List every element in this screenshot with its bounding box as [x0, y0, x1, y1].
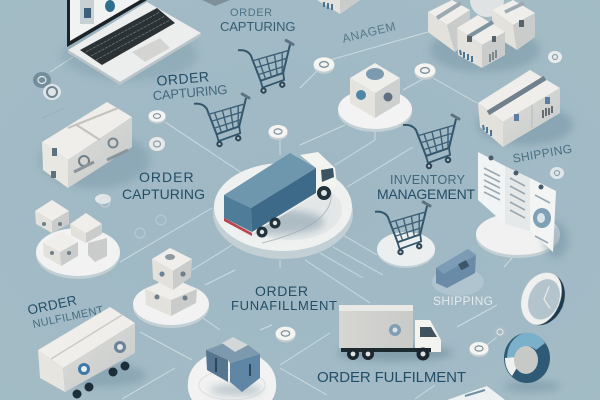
truck cab [415, 320, 441, 352]
cube back right [70, 213, 102, 233]
label: inventory management [377, 173, 475, 202]
box b [457, 15, 505, 45]
icon: blue shipping block [432, 249, 484, 296]
keyboard [80, 8, 175, 65]
label: order capturing lower: CAPTURING [122, 186, 205, 202]
icon: document corner at bottom [447, 386, 505, 400]
cube bottom [145, 277, 197, 300]
truck wheels [256, 226, 268, 238]
label: shipping lower: SHIPPING [433, 294, 493, 308]
panel: left sealed box [40, 102, 150, 188]
label: order capturing lower: ORDER [139, 169, 195, 185]
title labels: order capturing top: ORDER [230, 7, 273, 19]
label: order fulfilment: ORDER FULFILMENT [317, 369, 466, 386]
icon: cart one [238, 40, 293, 94]
panel: shipping boxes [477, 70, 573, 147]
label: order capturing middle: ORDER [156, 68, 210, 89]
connector lines [50, 32, 513, 399]
node icons lower right [276, 326, 507, 357]
node icons left [33, 72, 288, 204]
title labels: order capturing top: CAPTURING [220, 19, 296, 34]
label: management fragment: ANAGEM [341, 19, 397, 46]
icon: cart three [403, 115, 459, 169]
label: order funafilment: FUNAFILLMENT [231, 298, 337, 313]
laptop base [68, 2, 201, 82]
panel: top-right box cluster [428, 0, 540, 72]
cube back left [35, 200, 69, 221]
touchpad [132, 38, 170, 62]
panel: report booklet on platform [476, 152, 568, 258]
panel: laptop [62, 0, 201, 85]
main platform [213, 167, 353, 259]
panel: cubes on left platform [35, 200, 120, 279]
label: inventory management: INVENTORY [390, 173, 466, 187]
cab [300, 152, 337, 197]
wheels [347, 348, 359, 360]
icon: cart four on platform [375, 202, 435, 268]
label: order nulfilment: NULFILMENT [32, 304, 105, 331]
box a [428, 0, 470, 25]
title labels: order capturing top [220, 7, 296, 34]
label: order capturing middle [151, 67, 228, 103]
box c [492, 0, 535, 25]
laptop screen [67, 0, 147, 47]
faint icons [42, 108, 166, 238]
cargo box [224, 153, 316, 208]
panel: stacked cubes [133, 248, 209, 328]
cube front [43, 232, 78, 252]
top boxes cropped at edge [202, 0, 360, 14]
label: order funafilment: ORDER [255, 283, 309, 299]
cube top [152, 248, 192, 271]
label: inventory management: MANAGEMENT [377, 186, 475, 202]
label: order capturing lower [122, 169, 205, 202]
icon: donut chart [504, 333, 560, 392]
label: order nulfilment [26, 288, 105, 331]
label: order capturing middle: CAPTURING [152, 82, 228, 103]
panel: blue cubes on platform [188, 337, 276, 400]
label: order nulfilment: ORDER [26, 293, 78, 318]
icon: clock ring [513, 266, 573, 332]
chassis [341, 348, 431, 352]
node icons middle [314, 51, 564, 179]
icon: cart two [194, 94, 249, 147]
label: shipping upper: SHIPPING [512, 142, 573, 166]
panel: delivery truck [337, 305, 453, 361]
cube side [88, 238, 107, 262]
panel: box on wheels [38, 307, 146, 398]
panel: truck on main platform [213, 152, 353, 259]
panel: central inventory cube [338, 63, 412, 132]
label: order funafilment [231, 283, 337, 313]
truck cargo box [339, 305, 413, 348]
